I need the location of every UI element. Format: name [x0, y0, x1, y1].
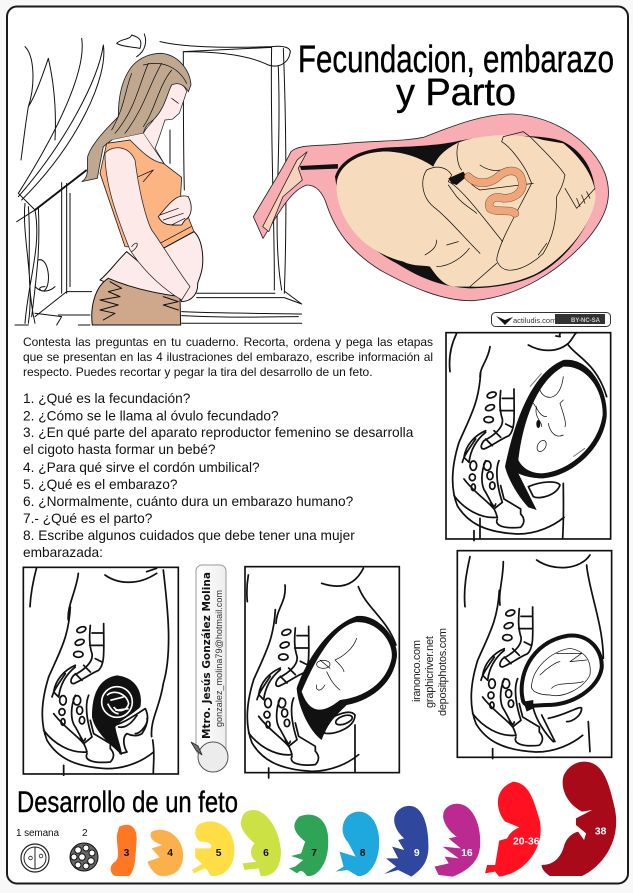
weeks 20-36: 20-36: [513, 837, 540, 848]
question list: 5. ¿Qué es el embarazo?: [23, 477, 178, 492]
week 4: [148, 830, 183, 876]
week 9: 9: [414, 848, 420, 859]
hand: [158, 196, 191, 225]
weeks 20-36: [485, 782, 541, 877]
week 5: 5: [216, 848, 222, 859]
panel: late pregnancy, top right: [446, 333, 611, 541]
week 3: 3: [124, 848, 130, 859]
umbilical cord: [468, 171, 522, 213]
belly: [163, 232, 203, 302]
instructions text: que se presentan en las 4 ilustraciones del embarazo, escribe información al: [23, 350, 433, 364]
week 38: 38: [595, 827, 607, 838]
arm: [105, 148, 190, 300]
hip: [100, 252, 180, 297]
week 16: 16: [461, 848, 473, 859]
badge: actiludis licence: BY-NC-SA: [571, 318, 601, 324]
face and neck: [143, 84, 187, 165]
question list: 1. ¿Qué es la fecundación?: [23, 391, 191, 406]
week 7: [289, 815, 328, 876]
cervix: [263, 152, 338, 232]
instructions text: respecto. Puedes recortar y pegar la tira del desarrollo de un feto.: [23, 365, 373, 379]
question list: 7.- ¿Qué es el parto?: [23, 511, 153, 526]
week 7: 7: [311, 848, 317, 859]
title line 2: y Parto: [396, 72, 516, 114]
week 6: [241, 810, 281, 876]
question list: 2. ¿Cómo se le llama al óvulo fecundado?: [23, 408, 279, 424]
week 4: 4: [167, 848, 173, 859]
website credits: iranonco.com: [411, 640, 423, 702]
label: 1 semana: 1 semana: [16, 828, 59, 839]
uterus: [253, 114, 608, 301]
week 8: [335, 812, 379, 876]
illustration: pregnant woman at window: [15, 34, 302, 325]
website credits: depositphotos.com: [437, 628, 449, 716]
question list: 4. ¿Para qué sirve el cordón umbilical?: [23, 460, 260, 475]
chart: fetal development strip: [111, 762, 616, 877]
instructions text: Contesta las preguntas en tu cuaderno. Recorta, ordena y pega las etapas: [23, 335, 433, 349]
author tag with apple: [191, 565, 228, 772]
week 3: [111, 825, 137, 876]
question list: embarazada:: [23, 545, 103, 560]
icon: morula: [70, 843, 98, 871]
chest: [112, 133, 163, 163]
icon: apple: [191, 742, 228, 772]
question list: 3. ¿En qué parte del aparato reproductor femenino se desarrolla: [23, 425, 414, 440]
panel: full term, right: [457, 551, 612, 759]
question list: 8. Escribe algunos cuidados que debe tener una mujer: [23, 528, 355, 543]
icon: two cell stage: [21, 844, 49, 872]
author tag with apple: Mtro. Jesús González Molina: [201, 572, 213, 739]
question list: [23, 391, 414, 560]
hair: [82, 53, 191, 182]
author tag with apple: gonzalez_molina79@hotmail.com: [214, 590, 224, 727]
illustration: fetus inside uterus: [253, 114, 608, 301]
question list: el cigoto hasta formar un bebé?: [23, 442, 216, 457]
fetus: [335, 132, 596, 288]
week 9: [384, 806, 428, 877]
panel: embryo, bottom left: [23, 567, 178, 775]
question list: 6. ¿Normalmente, cuánto dura un embarazo humano?: [23, 494, 354, 509]
panel: fetus, bottom centre: [245, 567, 399, 778]
website credits: [411, 628, 449, 716]
week 16: [435, 804, 480, 877]
instructions text: [23, 335, 433, 379]
badge: actiludis licence: [492, 312, 610, 326]
orange top: [100, 140, 194, 248]
label: week 2: 2: [82, 828, 88, 839]
website credits: graphicriver.net: [424, 636, 436, 708]
week 6: 6: [263, 848, 269, 859]
week 8: 8: [360, 848, 366, 859]
week 5: [192, 821, 234, 876]
badge: actiludis licence: actiludis.com: [513, 316, 556, 325]
week 38: [542, 762, 616, 876]
trousers: [92, 278, 181, 325]
heading: fetal development: Desarrollo de un feto: [17, 786, 238, 819]
